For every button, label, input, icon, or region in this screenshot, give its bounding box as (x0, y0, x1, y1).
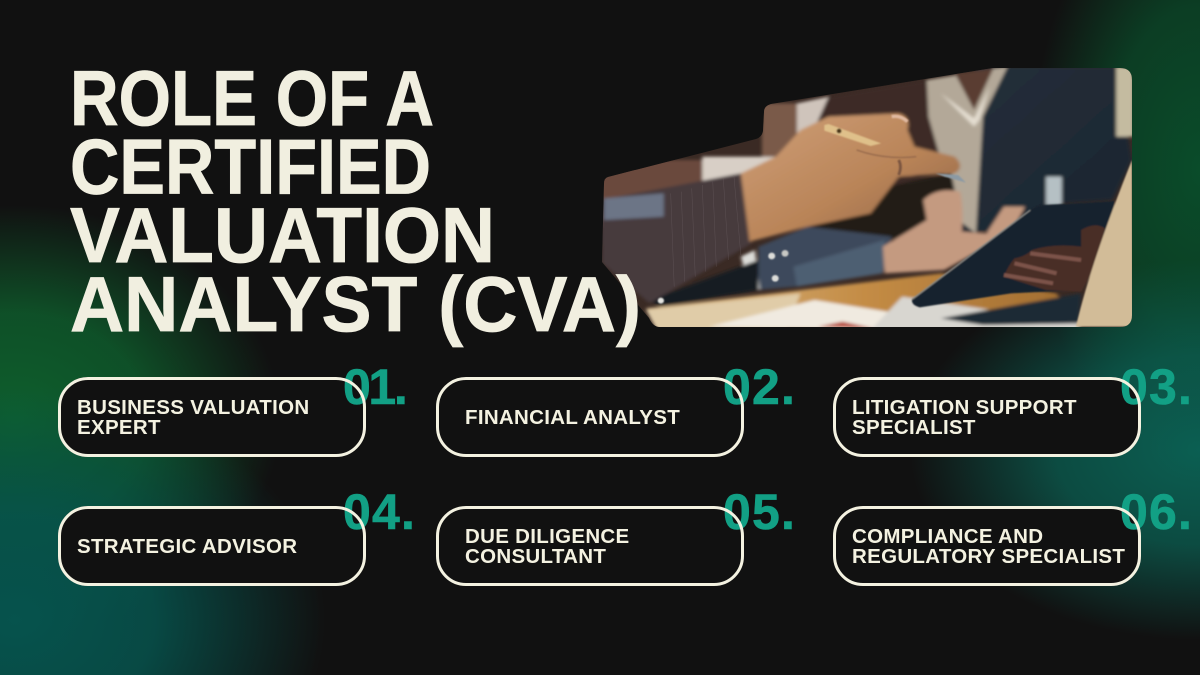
card 2: financial analyst (436, 377, 744, 457)
blue sleeve & cuff (758, 227, 892, 290)
far hand (883, 190, 1025, 273)
backdrop (590, 60, 1141, 337)
tablet (912, 160, 1133, 327)
knuckle shading (899, 160, 900, 175)
pointing hand (741, 113, 960, 242)
card 6: compliance and regulatory specialist (833, 506, 1141, 586)
jacket right (948, 67, 1132, 233)
card 1: business valuation expert: BUSINESS VALUATION EXPERT (77, 396, 309, 439)
holding fingers (1004, 225, 1105, 292)
card 2: financial analyst: FINANCIAL ANALYST (465, 406, 680, 429)
card 6: compliance and regulatory specialist: COMPLIANCE AND REGULATORY SPECIALIST (852, 524, 1125, 568)
card 3: litigation support specialist (833, 377, 1141, 457)
buttons (768, 253, 775, 259)
card 4: strategic advisor: STRATEGIC ADVISOR (77, 535, 297, 558)
number 06: 06. (1120, 484, 1193, 540)
card 3: litigation support specialist: LITIGATION SUPPORT SPECIALIST (852, 396, 1077, 439)
dark center (800, 173, 962, 240)
laptop lid (1076, 160, 1133, 327)
number 03: 03. (1120, 359, 1193, 415)
card 1: business valuation expert (58, 377, 366, 457)
title: ROLE OF A (70, 54, 434, 142)
title: CERTIFIED (70, 122, 431, 210)
number 02: 02. (723, 359, 796, 415)
card 5: due diligence consultant (436, 506, 744, 586)
sleeve stripes (671, 175, 741, 287)
table (646, 273, 1081, 330)
card 5: due diligence consultant: DUE DILIGENCE CONSULTANT (465, 524, 630, 568)
photo: hands with pen and tablet (602, 68, 1132, 327)
number 01: 01. (343, 359, 405, 415)
title: VALUATION (70, 191, 495, 279)
title (70, 54, 641, 348)
title: ANALYST (CVA) (70, 260, 641, 348)
striped sleeve (601, 173, 751, 303)
pen (658, 116, 966, 304)
card 4: strategic advisor (58, 506, 366, 586)
shirt (927, 67, 1007, 233)
number 04: 04. (343, 484, 416, 540)
number 05: 05. (723, 484, 796, 540)
